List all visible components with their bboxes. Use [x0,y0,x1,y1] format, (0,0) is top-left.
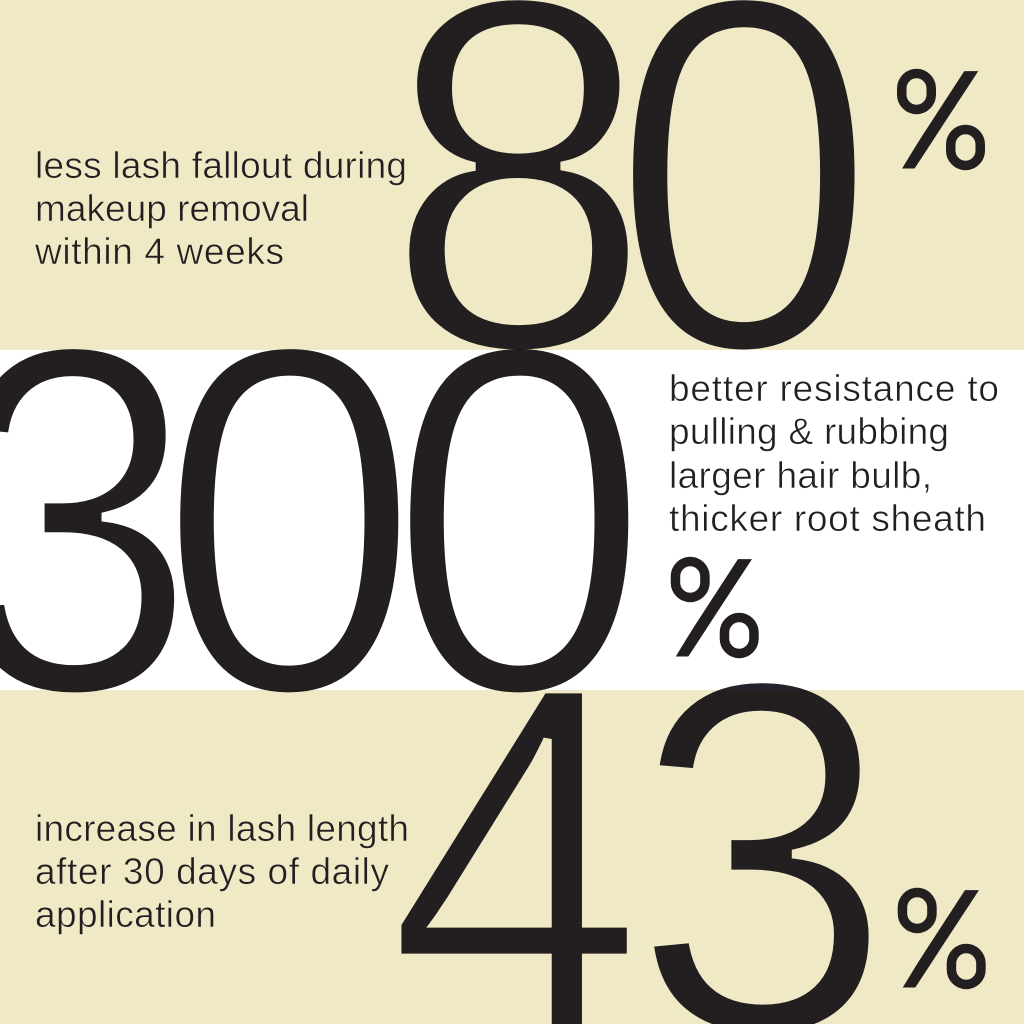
description: lash length: after 30 days of daily [35,851,390,892]
percent sign: 43: % [885,865,996,1016]
panel: 80 percent band [0,0,1024,350]
description: resistance: better resistance to [669,368,999,409]
panel: 300 percent band [0,350,1024,690]
description: resistance: thicker root sheath [669,498,986,539]
big number: 300: 0 [157,242,421,797]
big number: 80 [384,0,878,457]
description: lash length [35,808,409,935]
description: lash fallout: makeup removal [35,188,309,229]
big number: 300 [0,242,651,798]
description: lash fallout: within 4 weeks [34,231,284,272]
panel: 43 percent band [0,690,1024,1024]
big number: 300: 0 [387,242,651,797]
description: lash fallout: less lash fallout during [35,145,407,186]
description: resistance [669,368,999,539]
percent sign: 43 [898,888,986,990]
description: resistance: larger hair bulb, [669,455,932,496]
percent sign: 80: % [884,46,996,197]
description: lash length: increase in lash length [35,808,409,849]
description: resistance: pulling & rubbing [669,411,949,452]
percent sign: 300: % [658,534,769,685]
percent sign: 300 [670,556,759,658]
big number: 43 [387,573,894,1024]
percent sign: 80 [897,68,985,170]
description: lash fallout [34,145,407,272]
description: lash length: application [35,894,216,935]
